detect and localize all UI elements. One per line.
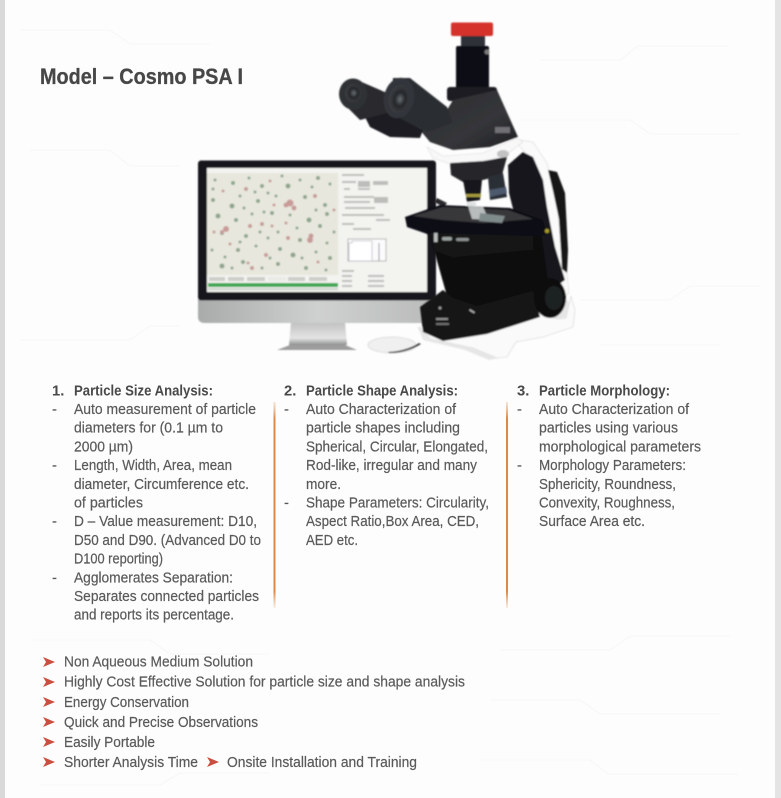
left eyepiece <box>339 78 387 120</box>
monitor stand <box>289 322 347 345</box>
text: morphology bullets: Surface Area etc. <box>539 514 645 530</box>
first objective <box>463 180 482 212</box>
trinocular head <box>420 90 518 150</box>
text: size analysis bullets: Separates connected particles <box>74 589 259 605</box>
text: size analysis bullets: - <box>52 570 57 586</box>
monitor with particle analysis software <box>198 160 438 350</box>
text: shape analysis bullets: - <box>284 496 289 512</box>
text: morphology bullets: Sphericity, Roundness, <box>539 477 676 493</box>
text: morphology bullets: particles using various <box>539 421 678 437</box>
camera collar <box>461 36 485 48</box>
feature text: Onsite Installation and Training <box>227 755 417 771</box>
progress bar <box>208 283 338 287</box>
text: shape analysis bullets: more. <box>306 477 341 493</box>
feature text: Easily Portable <box>64 735 155 751</box>
text: size analysis bullets: and reports its percentage. <box>74 608 234 624</box>
text: size analysis bullets: diameters for (0.1 µm to <box>74 421 223 437</box>
divider: column one and two <box>274 402 276 608</box>
section: particle shape analysis <box>284 384 489 549</box>
text: morphology bullets: - <box>517 402 522 418</box>
heading: particle size analysis: 1. <box>52 384 64 400</box>
base body <box>420 290 540 341</box>
condenser with indicator lights <box>430 233 533 259</box>
text: size analysis bullets: of particles <box>74 496 143 512</box>
text: size analysis bullets: D100 reporting) <box>74 552 163 568</box>
lower eyepiece block <box>363 110 423 138</box>
heading: particle morphology: Particle Morphology: <box>539 384 670 400</box>
white base plate <box>418 296 575 358</box>
text: size analysis bullets: diameter, Circumference etc. <box>74 477 249 493</box>
head neck ring <box>447 87 497 101</box>
feature text: Highly Cost Effective Solution for particle size and shape analysis <box>64 675 465 691</box>
base shadow <box>418 298 572 360</box>
red camera <box>451 22 493 36</box>
feature text: Energy Conservation <box>64 695 189 711</box>
focus lever <box>497 150 509 158</box>
particles <box>210 174 336 272</box>
text: size analysis bullets <box>52 402 261 624</box>
text: morphology bullets <box>517 402 701 530</box>
section: particle size analysis <box>52 384 261 624</box>
feature text: Quick and Precise Observations <box>64 715 258 731</box>
right eyepiece <box>380 75 453 132</box>
particle image <box>207 173 338 275</box>
microscope stage <box>405 205 549 240</box>
section: particle morphology <box>517 384 701 530</box>
stage arm clip <box>434 198 447 207</box>
nosepiece <box>450 157 507 182</box>
white collar ring <box>427 138 523 164</box>
focus knob <box>534 278 566 318</box>
feature list with arrow bullets <box>43 654 465 771</box>
monitor chin <box>198 298 438 323</box>
text: shape analysis bullets: Aspect Ratio,Box Area, CED, <box>306 514 479 530</box>
text: morphology bullets: Morphology Parameters: <box>539 458 686 474</box>
second objective <box>488 173 507 200</box>
text: size analysis bullets: 2000 µm) <box>74 439 133 455</box>
heading: particle size analysis: Particle Size Analysis: <box>74 384 213 400</box>
side strip <box>548 170 568 273</box>
text: shape analysis bullets: particle shapes including <box>306 421 460 437</box>
text: shape analysis bullets: AED etc. <box>306 533 358 549</box>
histogram chart <box>348 239 386 261</box>
text: size analysis bullets: - <box>52 514 57 530</box>
monitor bezel <box>198 160 436 300</box>
text: morphology bullets: Auto Characterization of <box>539 402 690 418</box>
divider: column two and three <box>506 402 508 608</box>
heading: particle shape analysis: 2. <box>284 384 296 400</box>
computer mouse <box>368 337 421 353</box>
text: size analysis bullets: - <box>52 458 57 474</box>
text: shape analysis bullets: Auto Characterization of <box>306 402 457 418</box>
text: size analysis bullets: D50 and D90. (Advanced D0 to <box>74 533 261 549</box>
feature text: Non Aqueous Medium Solution <box>64 654 253 670</box>
text: size analysis bullets: Length, Width, Area, mean <box>74 458 232 474</box>
text: morphology bullets: Convexity, Roughness, <box>539 496 675 512</box>
text: shape analysis bullets <box>284 402 489 549</box>
text: size analysis bullets: D – Value measurement: D10, <box>74 514 257 530</box>
text: morphology bullets: - <box>517 458 522 474</box>
microscope <box>339 22 575 360</box>
text: size analysis bullets: Auto measurement of particle <box>74 402 256 418</box>
nikon badge <box>495 127 510 133</box>
text: shape analysis bullets: Rod-like, irregular and many <box>306 458 478 474</box>
lower housing <box>447 250 547 308</box>
feature text: Shorter Analysis Time <box>64 755 198 771</box>
heading: particle morphology: 3. <box>517 384 529 400</box>
software control panel <box>342 174 390 287</box>
text: shape analysis bullets: - <box>284 402 289 418</box>
title: Model – Cosmo PSA I <box>40 64 243 89</box>
software buttons <box>209 277 327 281</box>
heading: particle shape analysis: Particle Shape Analysis: <box>306 384 458 400</box>
arrow icons <box>43 657 219 767</box>
white arm shell <box>513 139 569 301</box>
software screen <box>207 168 427 292</box>
text: size analysis bullets: Agglomerates Separation: <box>74 570 233 586</box>
text: morphology bullets: morphological parameters <box>539 439 701 455</box>
feature text <box>64 654 465 771</box>
under-stage black fill <box>430 236 550 314</box>
text: shape analysis bullets: Shape Parameters: Circularity, <box>306 496 489 512</box>
text: size analysis bullets: - <box>52 402 57 418</box>
text: shape analysis bullets: Spherical, Circular, Elongated, <box>306 439 488 455</box>
black arm <box>508 152 565 300</box>
camera tube <box>456 46 489 92</box>
